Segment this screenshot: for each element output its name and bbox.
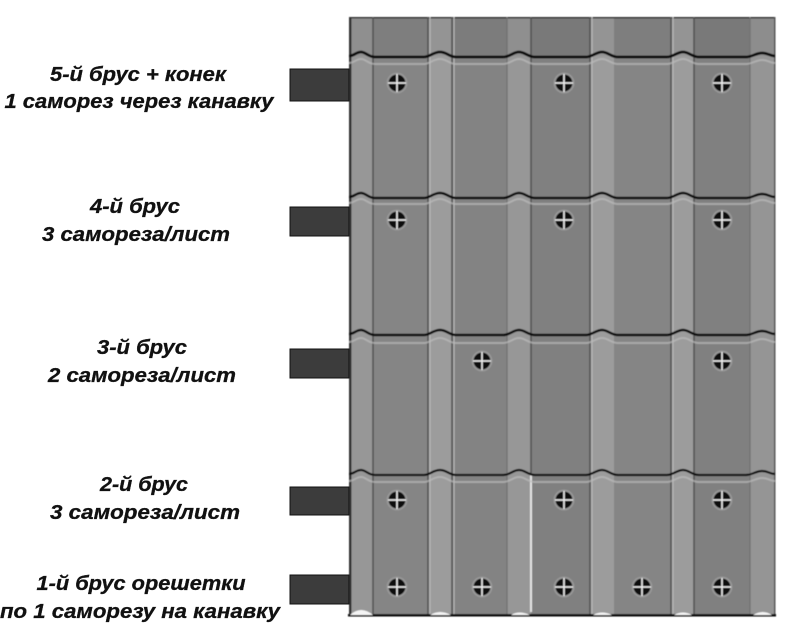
label: batten 5: [4, 64, 274, 113]
row 3 screws: [472, 350, 732, 372]
panel: metal roof sheet: [348, 17, 776, 616]
batten 3: [290, 349, 349, 378]
row 5 screws: [386, 72, 732, 94]
label: batten 5: 5-й брус + конек: [50, 64, 227, 86]
bottom edge of sheet: [348, 610, 776, 616]
label: batten 1: по 1 саморезу на канавку: [0, 601, 281, 623]
label: batten 2: 3 самореза/лист: [50, 502, 240, 524]
row 4 screws: [386, 210, 732, 230]
label: batten 2: 2-й брус: [99, 474, 188, 496]
label: batten 2: [50, 474, 240, 524]
roof sheet strips: [349, 17, 776, 615]
row 2 screws: [386, 490, 732, 510]
label: batten 1: [0, 573, 281, 623]
label: batten 5: 1 саморез через канавку: [4, 91, 274, 113]
batten 5: [290, 69, 349, 101]
label: batten 4: [42, 196, 230, 246]
label: batten 4: 4-й брус: [89, 196, 180, 218]
overlap lines between tile rows: [349, 52, 775, 482]
batten 1: [290, 575, 349, 604]
batten 4: [290, 207, 349, 236]
batten 2: [290, 487, 349, 515]
label: batten 3: 2 самореза/лист: [47, 365, 236, 387]
label: batten 1: 1-й брус орешетки: [36, 573, 246, 595]
row 1 screws: [386, 576, 732, 598]
label: batten 3: [47, 337, 236, 387]
label: batten 4: 3 самореза/лист: [42, 224, 230, 246]
label: batten 3: 3-й брус: [97, 337, 187, 359]
